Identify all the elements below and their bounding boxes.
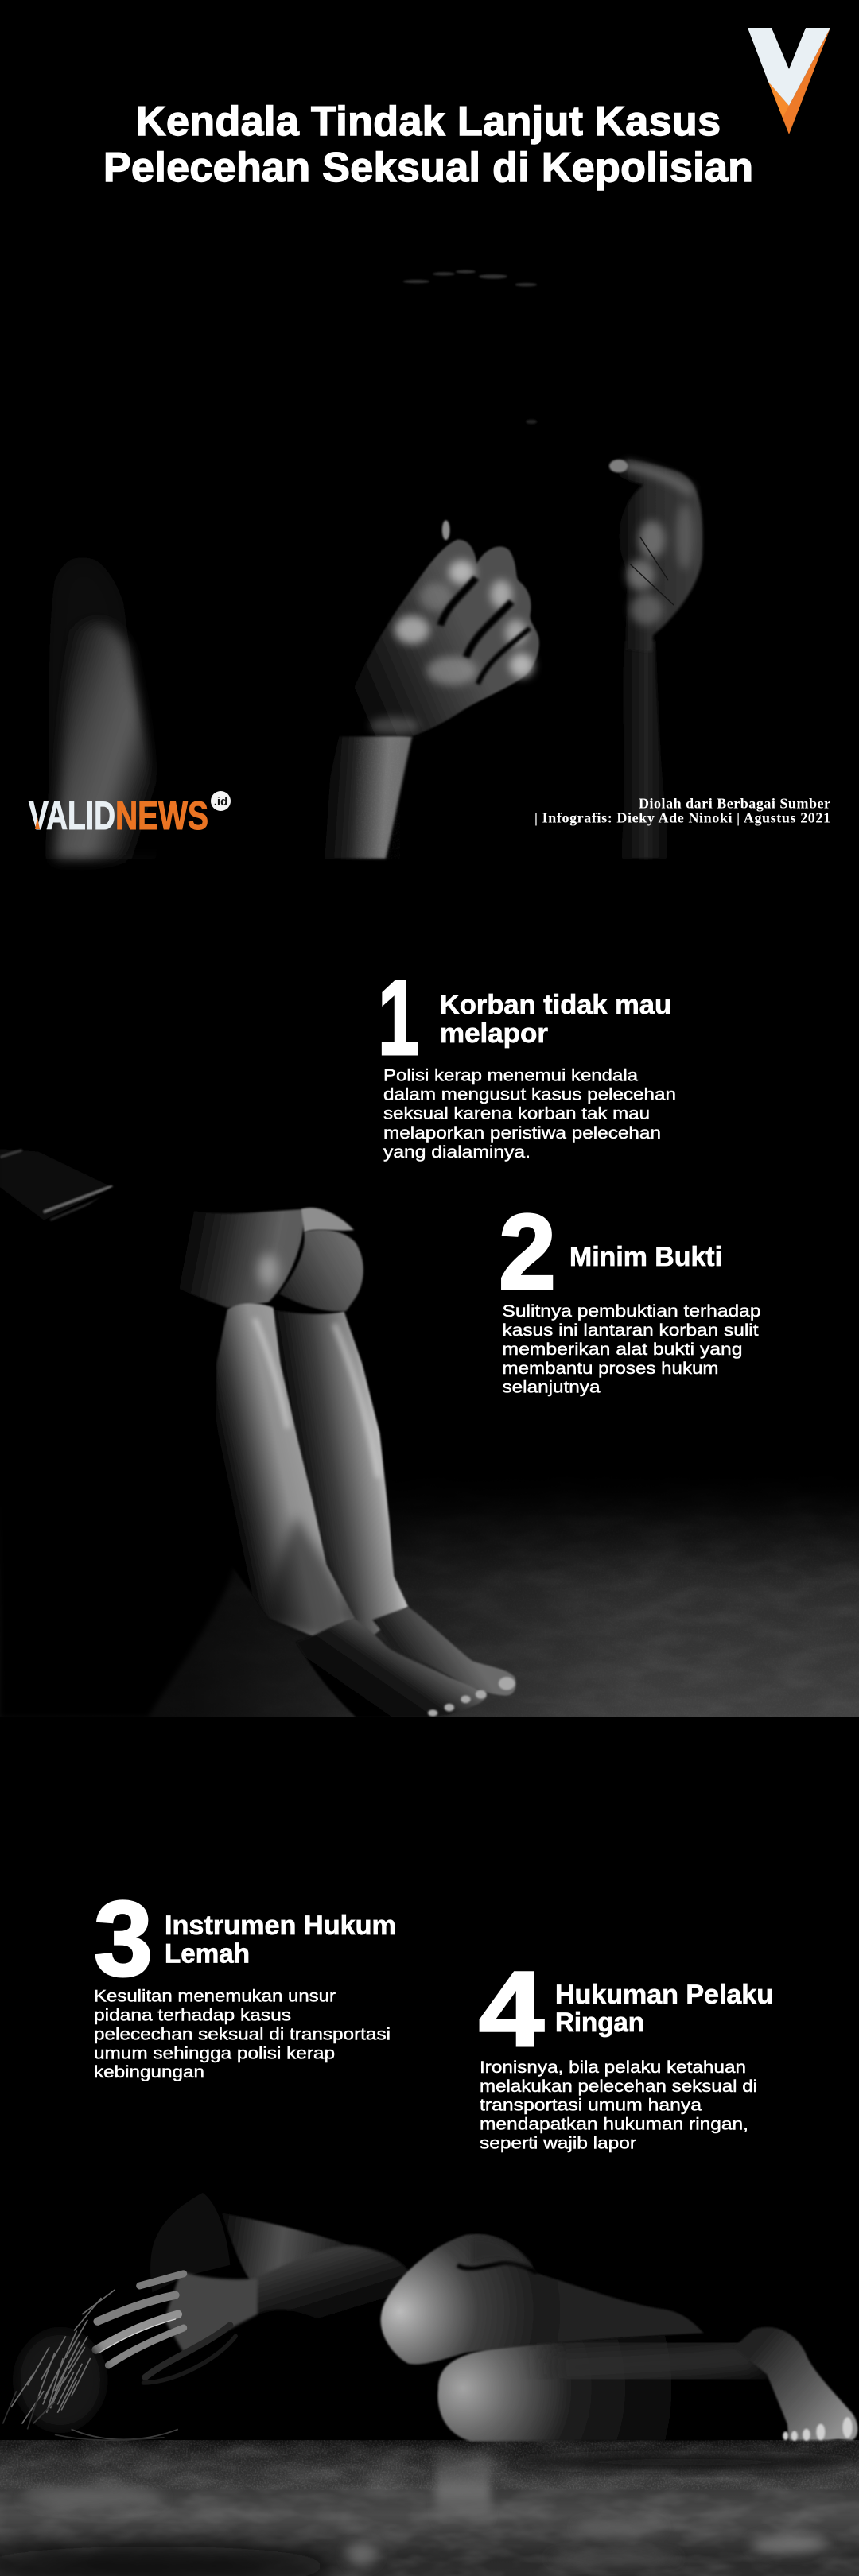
- clenched fist: [334, 520, 539, 736]
- title: [103, 99, 753, 191]
- heading 3: Instrumen Hukum: [165, 1911, 396, 1941]
- number 1: 1: [378, 959, 419, 1077]
- heading 4: Hukuman Pelaku: [555, 1980, 773, 2010]
- left shin: [216, 1303, 355, 1642]
- body 4: mendapatkan hukuman ringan,: [480, 2115, 748, 2134]
- hand and fist: [258, 1208, 363, 1311]
- forearm right: [619, 641, 671, 859]
- body 1: Polisi kerap menemui kendala: [383, 1065, 638, 1084]
- heading 4: Ringan: [555, 2008, 644, 2038]
- logo: V mark: [748, 28, 830, 134]
- right hand: [609, 459, 702, 652]
- item 3: instrumen hukum lemah: [94, 1880, 396, 2081]
- floor: [0, 2440, 859, 2576]
- forearm left: [315, 723, 412, 859]
- sleeve: [0, 1149, 112, 1220]
- item 2: minim bukti: [499, 1193, 761, 1396]
- body 3: pelecechan seksual di transportasi: [94, 2024, 391, 2043]
- body 2: memberikan alat bukti yang: [503, 1340, 743, 1359]
- body 4: [480, 2058, 757, 2153]
- source credit: [534, 795, 830, 825]
- body 1: melaporkan peristiwa pelecehan: [383, 1123, 661, 1143]
- heading 2: Minim Bukti: [569, 1242, 722, 1272]
- title: Pelecehan Seksual di Kepolisian: [103, 145, 753, 191]
- body 1: seksual karena korban tak mau: [383, 1104, 650, 1123]
- hair: [2, 2290, 178, 2440]
- floor: [0, 1501, 859, 1717]
- body 1: dalam mengusut kasus pelecehan: [383, 1084, 676, 1104]
- body 2: selanjutnya: [503, 1377, 601, 1396]
- body 2: membantu proses hukum: [503, 1359, 719, 1378]
- body 3: umum sehingga polisi kerap: [94, 2044, 335, 2063]
- feet: [296, 1607, 516, 1717]
- logo: Validnews wordmark: .id: [214, 795, 227, 809]
- body shadow: [1, 1552, 232, 1717]
- item 4: hukuman pelaku ringan: [479, 1950, 773, 2153]
- body 2: Sulitnya pembuktian terhadap: [503, 1302, 761, 1321]
- logo: Validnews wordmark: [29, 791, 231, 838]
- number 3: 3: [94, 1880, 153, 1999]
- body 4: Ironisnya, bila pelaku ketahuan: [480, 2058, 746, 2077]
- body 4: transportasi umum hanya: [480, 2096, 702, 2115]
- number 2: 2: [499, 1193, 556, 1312]
- body 4: melakukan pelecehan seksual di: [480, 2077, 757, 2096]
- body 3: [94, 1986, 391, 2081]
- heading 3: Lemah: [165, 1938, 250, 1969]
- item 1: korban tidak mau melapor: [378, 959, 676, 1162]
- body 3: kebingungan: [94, 2062, 204, 2081]
- arm: [89, 1186, 304, 1309]
- body 2: [503, 1302, 761, 1396]
- body 1: yang dialaminya.: [383, 1143, 531, 1162]
- right shin: [274, 1310, 408, 1636]
- forearm: [256, 2244, 409, 2318]
- title: Kendala Tindak Lanjut Kasus: [136, 99, 721, 145]
- photo: figure lying on floor: [0, 2193, 859, 2576]
- heading 1: [440, 990, 671, 1049]
- logo: Validnews wordmark: NEWS: [115, 793, 208, 838]
- logo: Validnews wordmark: VALID: [29, 793, 115, 838]
- photo: crying figure with clenched hands: [44, 270, 702, 859]
- thigh: [381, 2234, 704, 2365]
- number 4: 4: [479, 1950, 544, 2069]
- heading 1: melapor: [440, 1018, 548, 1049]
- hand on head: [96, 2271, 258, 2383]
- foot: [734, 2327, 857, 2441]
- heading 1: Korban tidak mau: [440, 990, 671, 1020]
- body 3: Kesulitan menemukan unsur: [94, 1986, 336, 2005]
- shoulder: [44, 556, 171, 859]
- body 3: pidana terhadap kasus: [94, 2005, 291, 2024]
- body 4: seperti wajib lapor: [480, 2134, 636, 2153]
- veil and upper arm: [150, 2193, 351, 2292]
- calf and knee: [438, 2328, 767, 2442]
- body 1: [383, 1065, 676, 1162]
- heading 3: [165, 1911, 396, 1969]
- hair highlight: [403, 270, 537, 424]
- source credit: Diolah dari Berbagai Sumber: [639, 795, 830, 811]
- heading 4: [555, 1980, 773, 2038]
- source credit: | Infografis: Dieky Ade Ninoki | Agustus 2021: [534, 809, 830, 825]
- photo: seated figure hugging knees: [0, 1149, 859, 1717]
- body 2: kasus ini lantaran korban sulit: [503, 1321, 759, 1340]
